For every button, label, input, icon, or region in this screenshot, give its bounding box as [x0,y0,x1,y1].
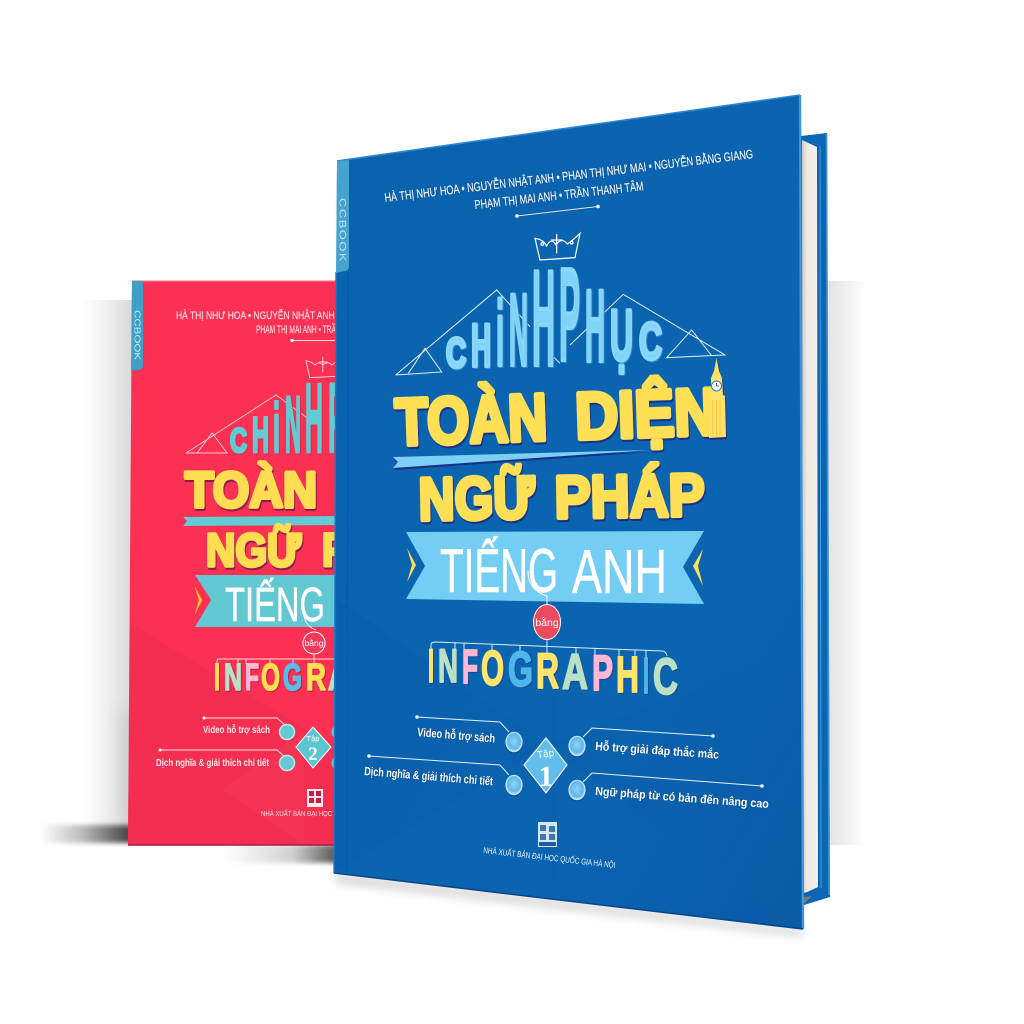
red triangles line art [186,395,310,453]
red title: NGỮ P: NGỮ [206,524,302,576]
blue infographic: I [428,639,434,692]
red diamond: Tập 2: 2 [308,744,318,765]
red infographic: F [245,657,259,699]
blue title: CHINH PHỤC: N [509,273,528,387]
red title: CHINH PHỤC: C [230,422,247,460]
red spine tab: CCBOOK [132,310,142,360]
background shadow panels [83,281,866,845]
blue infographic: C [653,648,678,705]
blue ribbon [393,450,650,468]
red publisher [261,789,386,818]
blue callout texts: Video hỗ trợ sách [417,724,496,746]
cover edges [334,95,803,929]
blue infographic: A [562,644,588,700]
blue spine tab: CCBOOK [338,198,348,263]
red title: CHINH PHỤC: N [285,380,301,469]
red banner [195,575,345,632]
red infographic: N [224,657,242,699]
blue banner: TIẾNG ANH: ANH [572,538,667,607]
blue title: CHINH PHỤC: C [639,313,662,371]
blue infographic: H [616,646,639,703]
blue title: CHINH PHỤC: i [496,283,504,385]
blue infographic [428,639,678,705]
red circle: bằng [303,610,325,654]
book: red volume 2: P [328,363,346,473]
blue title: CHINH PHỤC: H [471,312,491,379]
red authors: HÀ THỊ NHƯ HOA • NGUYỄN NHẬT ANH • PHAN THỊ NHƯ MAI [176,309,421,322]
book: red volume 2 [128,281,434,845]
book: blue volume 1 [334,95,830,929]
blue title: CHINH PHỤC: C [446,329,466,376]
blue callout texts: Hỗ trợ giải đáp thắc mắc [595,738,720,762]
red authors [176,309,421,342]
blue diamond: Tập 1: 1 [538,760,554,793]
blue spine tab [336,160,349,273]
red infographic: I [214,657,220,699]
red crown [306,357,341,378]
red publisher: NHÀ XUẤT BẢN ĐẠI HỌC QUỐC GIA HÀ NỘI [261,808,386,818]
blue authors: PHẠM THỊ MAI ANH • TRẦN THANH TÂM [474,178,644,212]
blue infographic: R [536,643,559,699]
red title: CHINH PHỤC: H [305,363,323,473]
blue infographic: P [592,645,613,701]
red callouts [156,716,346,770]
back cover and pages [801,133,830,905]
blue title: NGỮ PHÁP: NGỮ [418,464,535,533]
publisher logo [538,822,557,847]
red ribbon [183,516,345,526]
blue banner: TIẾNG ANH: TIẾNG [440,537,558,606]
blue title: TOÀN DIỆN: DIỆN [574,374,718,453]
blue title: CHINH PHỤC: H [532,242,555,394]
cover facets [334,600,803,929]
blue authors [384,146,754,218]
red cover [128,281,340,845]
blue diamond: Tập 1: Tập [536,748,555,761]
blue infographic: I [643,647,649,704]
red banner: TIẾNG [225,578,325,632]
red infographic: G [283,657,302,699]
red title: CHINH PHỤC: i [273,389,280,467]
blue authors: HÀ THỊ NHƯ HOA • NGUYỄN NHẬT ANH • PHAN THỊ NHƯ MAI • NGUYỄN BẰNG GIANG [384,146,754,205]
red title: CHINH PHỤC [230,363,346,473]
blue title: CHINH PHỤC: H [585,269,605,383]
red spine tab [131,281,143,371]
blue infographic: O [481,642,504,696]
blue callout bullets [506,732,585,800]
red diamond: Tập 2 [296,727,331,768]
red infographic [214,654,348,699]
red diamond: Tập 2: Tập [307,734,319,743]
red infographic: A [328,657,348,699]
blue title: NGỮ PHÁP: PHÁP [554,461,705,531]
soft shadow under blue book [335,874,803,936]
red callouts: Video hỗ trợ sách [203,723,270,736]
blue title: TOÀN DIỆN: TOÀN [394,380,548,459]
blue title: CHINH PHỤC: P [559,241,580,388]
icon: Big Ben tower [709,358,726,438]
blue diamond: Tập 1 [524,738,567,793]
blue title: TOÀN DIỆN [394,374,718,459]
blue circle: bằng [534,604,560,640]
red circle: bằng: bằng [305,638,324,648]
red infographic: O [261,657,280,699]
blue callout lines [368,716,763,787]
red title: CHINH PHỤC: H [252,407,269,463]
floor shadow under red book [40,825,337,863]
blue title: CHINH PHỤC: Ụ [610,296,633,376]
blue callout texts [364,724,769,811]
blue infographic: G [508,643,533,697]
blue callout texts: Ngữ pháp từ có bản đến nâng cao [595,784,769,811]
red title: TOÀN: TOÀN [185,462,317,518]
blue title: NGỮ PHÁP [418,461,705,533]
red title: NGỮ P [206,524,434,576]
red callouts: Dịch nghĩa & giải thích chi tiết [156,757,270,769]
blue crown [535,233,580,260]
blue callout texts: Dịch nghĩa & giải thích chi tiết [364,764,493,788]
blue title: CHINH PHỤC [446,241,662,394]
blue front cover [334,95,803,929]
red infographic: R [306,657,326,699]
blue banner: TIẾNG ANH [406,531,704,607]
publisher name: NHÀ XUẤT BẢN ĐẠI HỌC QUỐC GIA HÀ NỘI [483,844,616,870]
red title: NGỮ P: PHÁP [322,524,434,576]
blue triangles line art [396,290,725,375]
blue infographic: F [462,641,478,694]
blue infographic: N [438,639,458,692]
red authors: PHẠM THỊ MAI ANH • TRẦN THANH TÂM [256,323,381,336]
blue circle: bằng: bằng [535,616,559,629]
